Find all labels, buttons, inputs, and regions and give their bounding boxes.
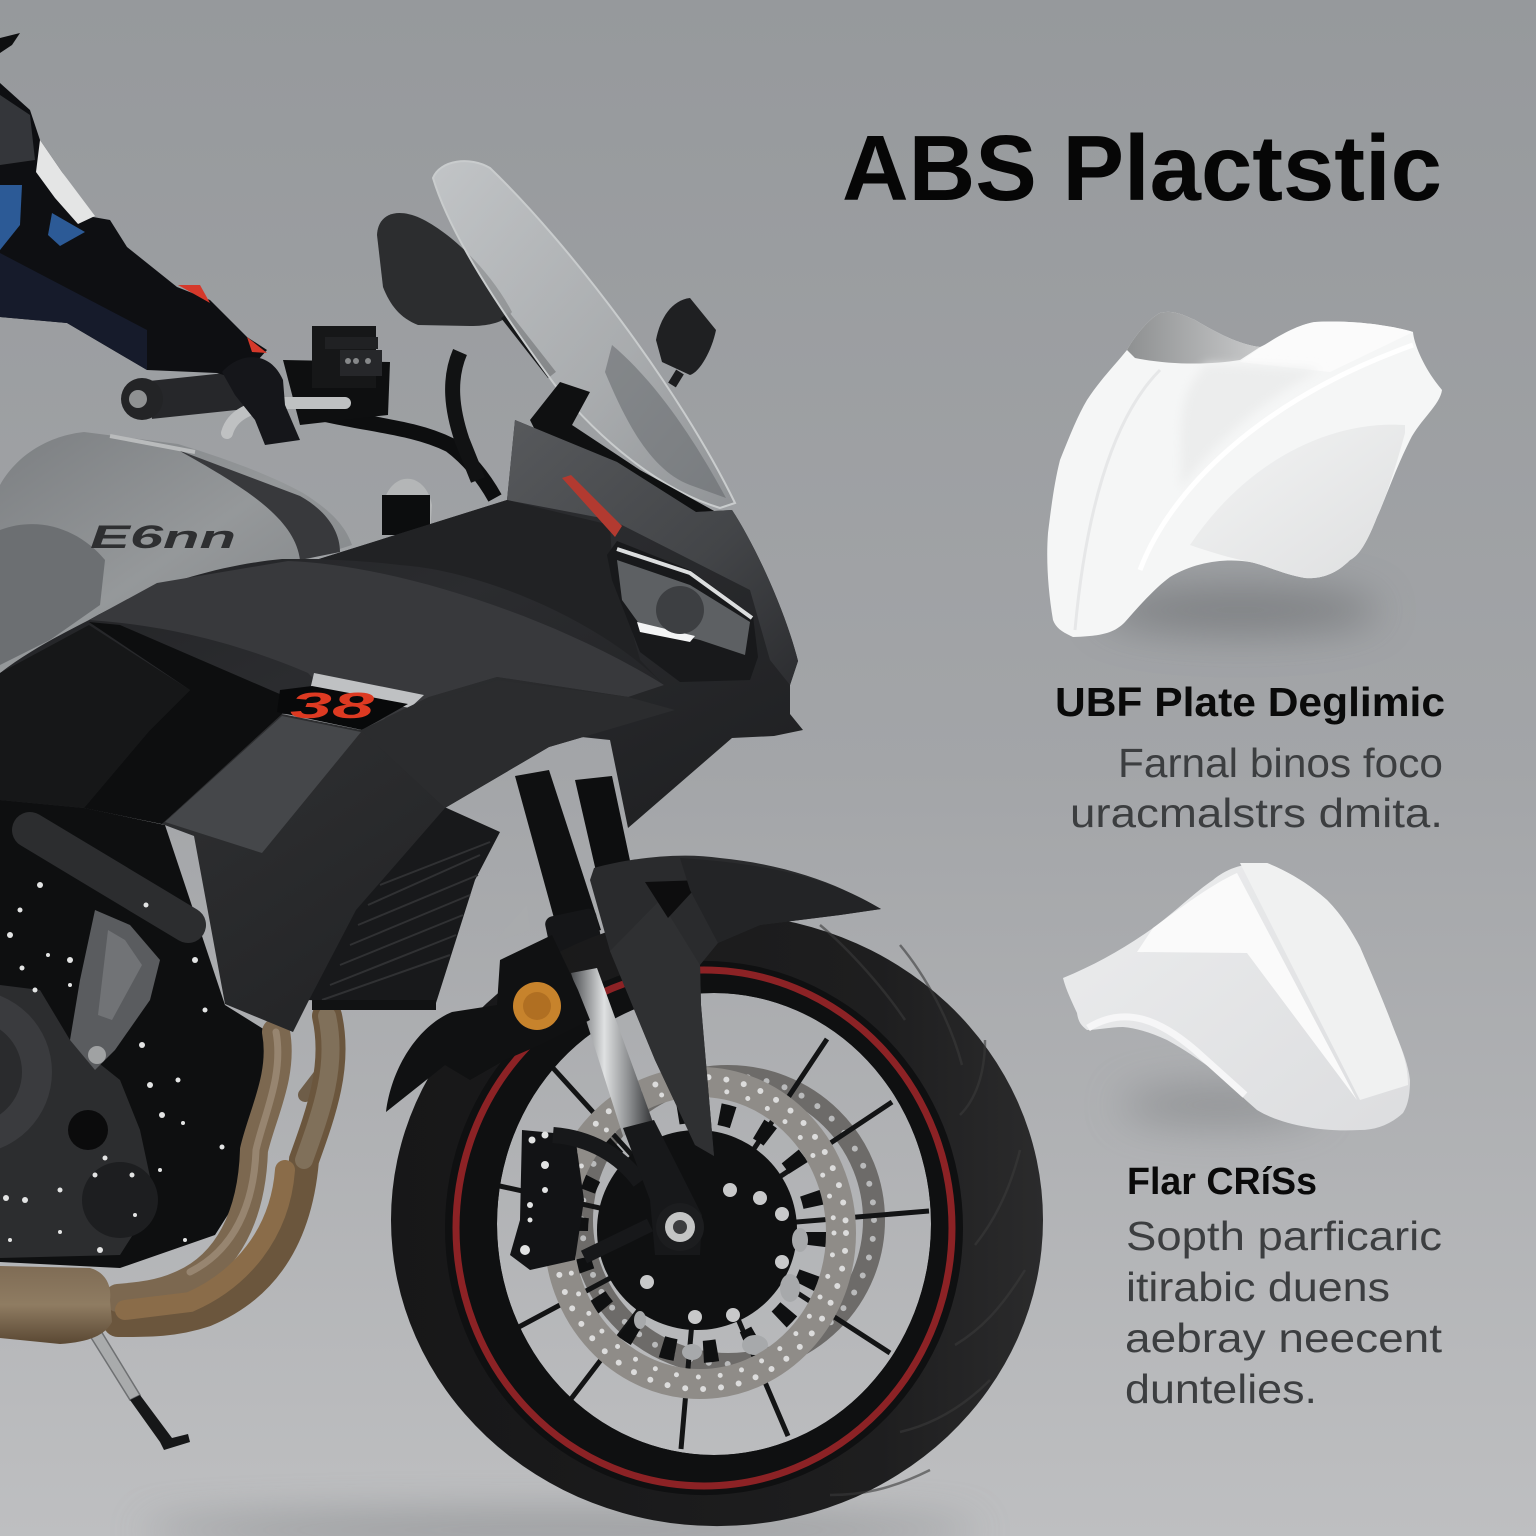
- hub carrier: [577, 1112, 817, 1360]
- body text 2: duntelies.: [1125, 1366, 1317, 1412]
- rear hugger and reflector mount: [386, 905, 590, 1112]
- subheading 2: Flar CRíSs: [1127, 1161, 1317, 1203]
- handlebar and controls: [121, 326, 495, 535]
- body text 2: aebray neecent: [1125, 1315, 1443, 1361]
- helmet tip: [0, 33, 20, 53]
- ground shadow: [140, 1514, 980, 1536]
- right mirror: [656, 298, 716, 385]
- body text 1: uracmalstrs dmita.: [1070, 790, 1443, 836]
- engine: [0, 790, 265, 1268]
- product: upper white fairing: [1047, 312, 1442, 637]
- amber reflector: [513, 982, 561, 1030]
- title: ABS Plactstic: [842, 116, 1442, 220]
- brake lever: [227, 403, 345, 433]
- rider arm: [0, 33, 300, 445]
- tyre: [391, 914, 1043, 1526]
- kickstand: [90, 1331, 190, 1450]
- upper fairing: [0, 420, 803, 828]
- red rim stripe: [456, 970, 952, 1486]
- glove: [222, 357, 300, 445]
- body text 2: itirabic duens: [1126, 1264, 1390, 1310]
- body text 2: Sopth parficaric: [1126, 1213, 1442, 1259]
- front wheel: [391, 914, 1043, 1526]
- brake caliper: [510, 1130, 650, 1270]
- windshield: [433, 161, 735, 508]
- spokes: [495, 1039, 929, 1449]
- front brake disc: [559, 1082, 841, 1384]
- side panel: [162, 677, 675, 1032]
- fork tubes upper: [515, 770, 632, 973]
- decal: red 38: 38: [290, 685, 374, 726]
- shadow: [1120, 1085, 1320, 1125]
- shadow: [1100, 586, 1380, 634]
- radiator: [305, 805, 500, 1010]
- brake reservoir: [312, 326, 382, 388]
- tank badge: E6nn: [90, 519, 236, 555]
- rear brake disc holes: [582, 1076, 874, 1364]
- rear brake disc: [582, 1076, 874, 1364]
- tread grooves: [820, 925, 1025, 1495]
- red marker light: [562, 475, 622, 537]
- exhaust pipes: [118, 1016, 338, 1322]
- black rim: [445, 961, 963, 1495]
- product: lower white fender: [1063, 863, 1410, 1130]
- front mudguard: [590, 856, 881, 1156]
- front fork: [571, 968, 704, 1255]
- motorcycle illustration: [0, 33, 1043, 1536]
- front brake disc holes: [554, 1077, 846, 1389]
- windscreen bracket: [530, 382, 716, 525]
- headlight: [607, 541, 758, 682]
- body text 1: [1070, 740, 1443, 836]
- grip: [150, 390, 245, 400]
- decal: red 38: [277, 673, 424, 730]
- body text 1: Farnal binos foco: [1118, 740, 1443, 786]
- engine speckles: [3, 882, 224, 1253]
- fuel tank: [0, 432, 352, 672]
- left mirror: [377, 213, 552, 375]
- muffler: [0, 1266, 112, 1344]
- subheading 1: UBF Plate Deglimic: [1055, 679, 1445, 725]
- body text 2: [1125, 1213, 1443, 1412]
